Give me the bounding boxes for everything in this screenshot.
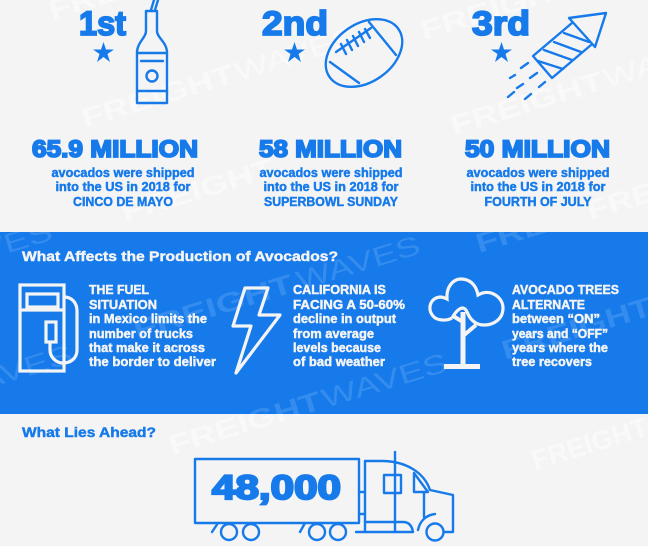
caption: avocados were shipped (466, 166, 610, 180)
panel: what affects production: WAVES (318, 347, 451, 414)
rank: 3rd: 3rd (472, 5, 530, 43)
panel: what affects production: FREIGHT (498, 292, 648, 366)
icon: tree (430, 279, 503, 366)
text: fuel (89, 283, 216, 369)
number: 65.9 million: 65.9 MILLION (32, 136, 198, 163)
caption: into the US in 2018 for (470, 180, 606, 194)
text: avocado trees (512, 283, 619, 369)
text: fuel: that make it across (89, 341, 205, 355)
caption: into the US in 2018 for (264, 180, 399, 194)
text: california: CALIFORNIA IS (293, 283, 386, 297)
text: avocado trees: ALTERNATE (512, 298, 585, 312)
heading: what lies ahead: What Lies Ahead? (22, 424, 156, 440)
icon: star (93, 42, 114, 62)
text: california: from average (293, 327, 374, 341)
caption (466, 166, 610, 209)
text: avocado trees: years and “OFF” (512, 327, 608, 341)
caption (260, 166, 402, 209)
icon: star (284, 42, 305, 62)
caption: FOURTH OF JULY (484, 195, 592, 209)
icon: bottle (137, 0, 167, 103)
number: 58 million: 58 MILLION (259, 136, 402, 163)
text: FREIGHT (528, 412, 648, 476)
text: avocado trees: tree recovers (512, 355, 592, 369)
icon: football (313, 5, 415, 101)
text: FRE (583, 177, 648, 226)
caption (52, 166, 194, 209)
panel: what affects production: WAVES (293, 230, 424, 296)
text: california (293, 283, 405, 369)
text: fuel: in Mexico limits the (89, 312, 207, 326)
icon: truck (195, 452, 453, 540)
caption: into the US in 2018 for (56, 180, 191, 194)
icon: lightning bolt (233, 288, 280, 373)
stat: 2nd place (259, 5, 415, 209)
text: avocado trees: years where the (512, 341, 608, 355)
panel: what affects production: FREIGHT (472, 183, 634, 259)
stat: 3rd place (465, 5, 610, 209)
text: FREIGHT (165, 386, 325, 461)
icon: fuel pump (20, 285, 77, 371)
icon: star (491, 42, 512, 62)
text: WAVES (231, 22, 359, 87)
heading: what affects: What Affects the Production of Avocados? (22, 248, 338, 264)
text: california: decline in output (293, 312, 397, 326)
caption: avocados were shipped (52, 166, 194, 180)
panel: what affects production: FREIGHT (165, 386, 325, 461)
number: 48,000: 48,000 (212, 469, 341, 507)
icon: firework rocket (508, 13, 606, 99)
caption: avocados were shipped (260, 166, 402, 180)
text: fuel: THE FUEL (89, 283, 149, 297)
caption: CINCO DE MAYO (73, 195, 173, 209)
rank: 1st: 1st (79, 5, 126, 43)
text: fuel: the border to deliver (89, 355, 216, 369)
text: california: levels because (293, 341, 381, 355)
text: avocado trees: AVOCADO TREES (512, 283, 619, 297)
text: avocado trees: between “ON” (512, 312, 600, 326)
caption: SUPERBOWL SUNDAY (264, 195, 399, 209)
number: 50 million: 50 MILLION (465, 136, 610, 163)
stat: 1st place (32, 0, 198, 209)
rank: 2nd: 2nd (262, 5, 328, 43)
text: fuel: SITUATION (89, 298, 157, 312)
text: fuel: number of trucks (89, 327, 193, 341)
text: california: of bad weather (293, 355, 385, 369)
text: FREIGHT (447, 66, 607, 141)
panel: what affects production (0, 232, 648, 414)
panel: what affects production: FREIGHT (130, 269, 297, 346)
text: FREIGHT (118, 153, 278, 228)
text: FREIGHT (78, 59, 238, 134)
text: california: FACING A 50-60% (293, 298, 405, 312)
